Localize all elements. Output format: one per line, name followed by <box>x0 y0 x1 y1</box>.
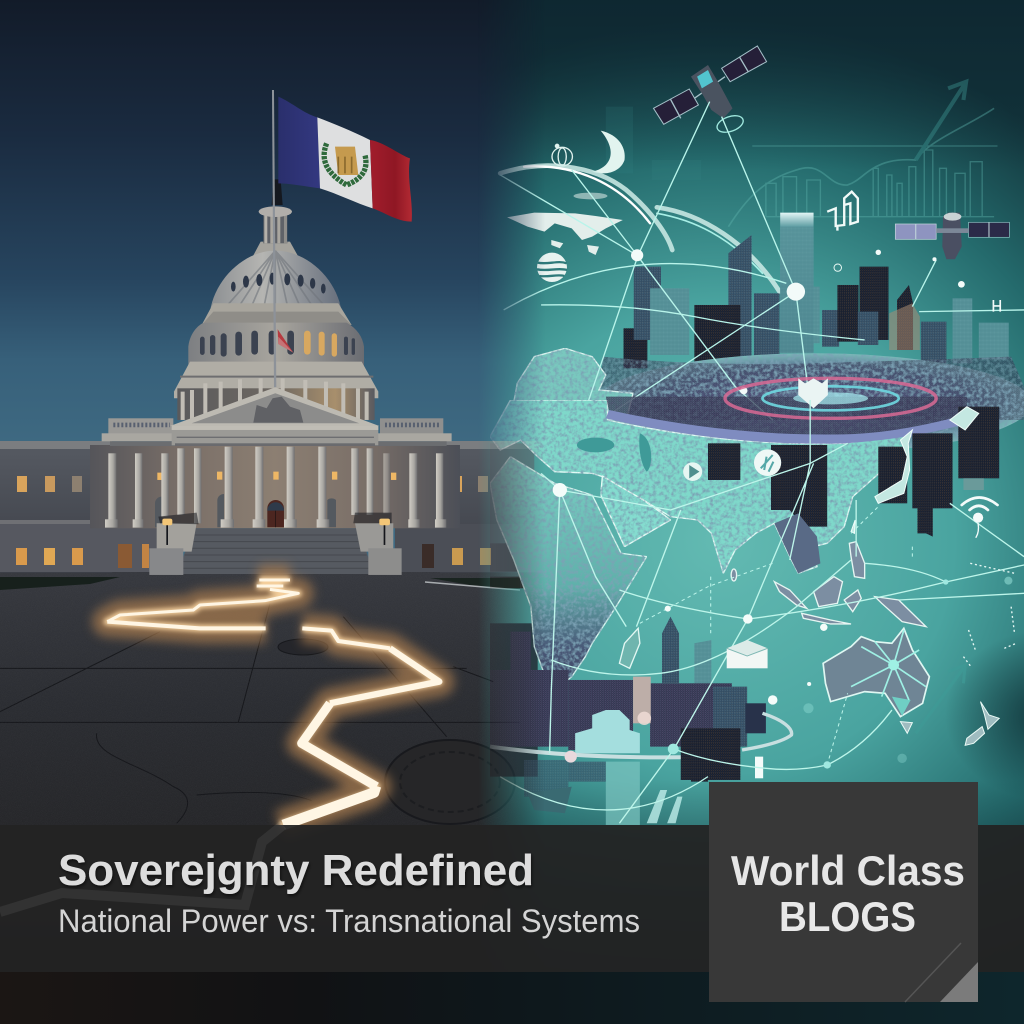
grand staircase <box>177 528 374 574</box>
tasmania and new zealand <box>900 702 999 745</box>
flagpole with small flag <box>272 90 293 387</box>
disc rim <box>606 410 970 444</box>
wall lanterns and door <box>155 472 396 527</box>
bottom dark strip <box>0 972 1024 1024</box>
skyline towers <box>624 213 1009 420</box>
statue atop dome <box>272 179 283 205</box>
pavement plaza <box>0 572 560 1024</box>
africa landmass <box>490 457 647 693</box>
pavement joints and cracks <box>0 560 520 830</box>
balustrades <box>108 418 443 434</box>
circular app icons <box>637 449 781 725</box>
world class blogs logo box <box>709 782 978 1002</box>
network lines and nodes on map <box>500 400 1024 823</box>
portico back wall <box>90 445 460 528</box>
band background <box>0 825 1024 972</box>
chart icon <box>827 192 858 231</box>
dome base and drum <box>174 303 378 398</box>
left scene: national capitol at dusk <box>0 0 560 1024</box>
upper layer of network, skyline and satellites <box>500 46 1024 453</box>
arabian peninsula <box>601 476 671 547</box>
stair pedestals and lamps <box>149 513 402 575</box>
japan, korea and east asian islands <box>851 407 979 533</box>
ziggurat building <box>575 710 640 753</box>
subtitle text: National Power vs: Transnational Systems <box>58 903 640 939</box>
ghost neon line through band <box>0 825 283 912</box>
dark city tiles in asia <box>708 407 999 573</box>
peristyle colonnade <box>177 378 375 420</box>
orbit arcs <box>500 166 780 292</box>
inland seas <box>577 433 651 472</box>
capitol right wing <box>395 441 560 573</box>
network lines and nodes <box>500 102 1024 420</box>
crescent moon <box>592 131 625 173</box>
teal pacific dots <box>963 563 1016 667</box>
satellite one <box>653 46 767 135</box>
europe landmass <box>510 348 633 420</box>
indonesia and philippines <box>731 542 926 627</box>
small globe icon <box>552 144 572 166</box>
white world map fragment <box>507 193 623 255</box>
lantern <box>253 206 298 257</box>
lower city skyline <box>490 617 766 780</box>
city disc platform <box>596 353 1024 453</box>
plaza neon border line <box>107 580 439 825</box>
manhole covers <box>278 639 515 824</box>
entablature and cornice <box>102 426 452 446</box>
faded city patch on left edge <box>490 443 538 777</box>
dark vignette lower right <box>945 630 1024 800</box>
faint tall ghost blocks <box>606 107 633 132</box>
lower layer of map and continents <box>490 378 1024 825</box>
brand line one: World Class <box>731 847 965 894</box>
faint growth chart with arrow <box>728 82 997 227</box>
lawn strips <box>0 577 520 590</box>
envelope icon <box>727 640 768 668</box>
capitol left wing <box>0 441 160 573</box>
reflected lower city and map <box>524 760 708 825</box>
eurasia landmass <box>490 400 912 573</box>
brand line two: BLOGS <box>779 893 916 940</box>
striped planet <box>537 253 567 282</box>
lower city ring <box>490 713 792 778</box>
teal background <box>482 13 1024 825</box>
dome <box>210 251 342 312</box>
madagascar <box>619 628 640 668</box>
right scene: digital transnational network <box>482 0 1024 825</box>
faint arrow lower right <box>916 665 965 733</box>
shield icon <box>798 378 828 408</box>
title text: Soverejgnty Redefined <box>58 846 534 895</box>
pediment <box>170 387 379 426</box>
satellite two <box>895 213 1009 259</box>
corner accent <box>905 943 978 1002</box>
wifi icon <box>962 497 997 537</box>
flag emblem <box>324 143 366 185</box>
sky <box>0 0 560 600</box>
capitol central building with dome <box>90 90 460 575</box>
portico columns <box>105 447 446 528</box>
box background <box>709 782 978 1002</box>
city underside of disc <box>606 397 967 435</box>
disc glowing rings <box>725 378 936 418</box>
top darkening <box>520 0 1024 146</box>
bottom title band <box>0 825 1024 972</box>
bottom darkening <box>440 780 1024 1024</box>
national flag <box>278 97 412 222</box>
australia <box>823 628 929 717</box>
